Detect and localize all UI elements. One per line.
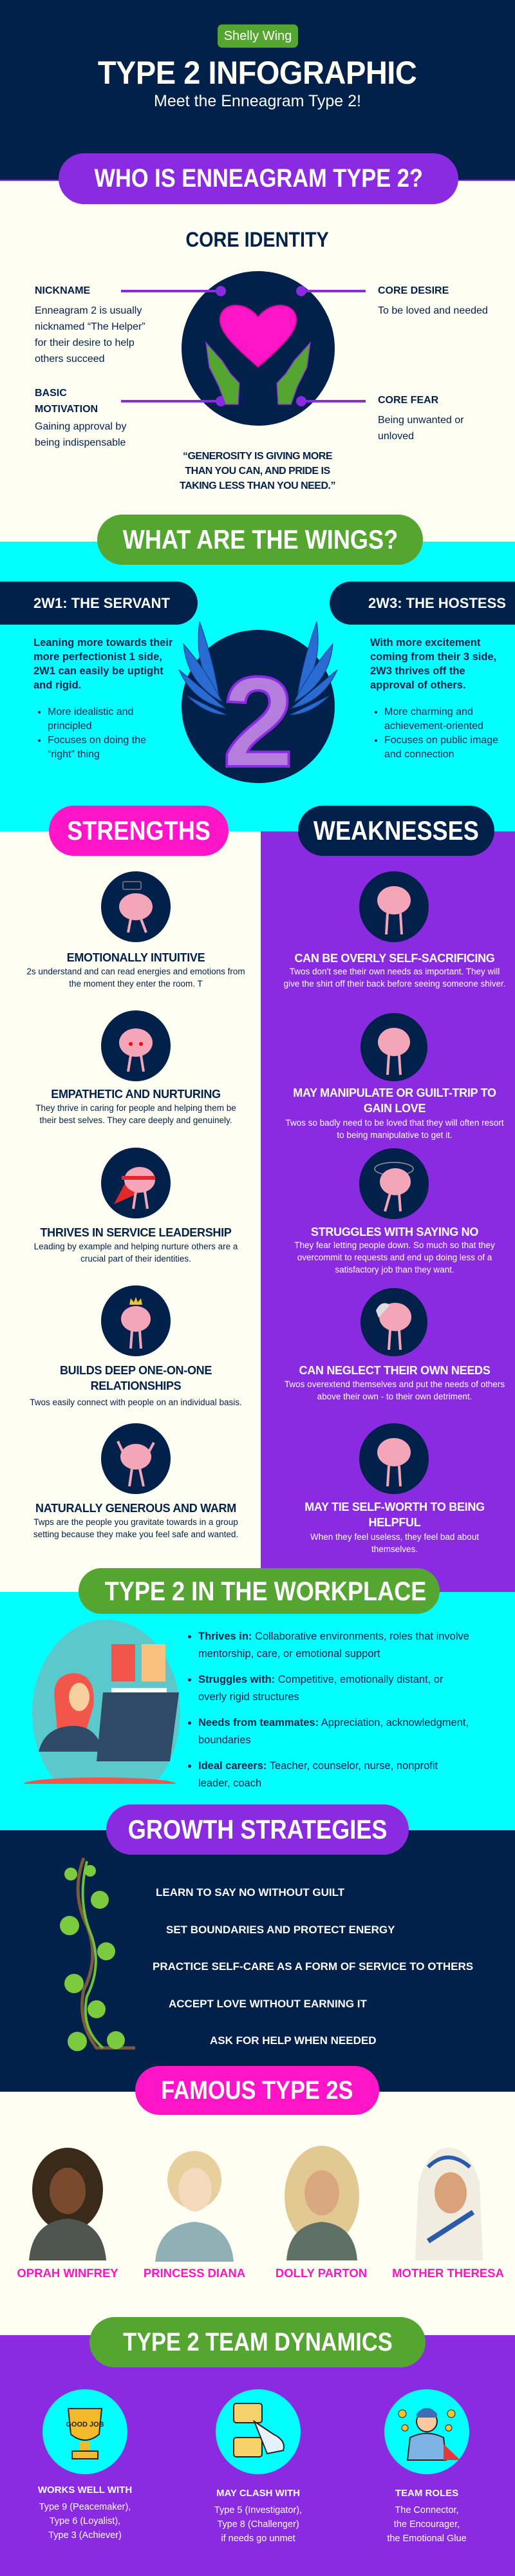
weakness 1: Twos don't see their own needs as important. They will give the shirt off their back before seeing someone shiver. [284, 967, 505, 989]
heading: who is type 2: WHO IS ENNEAGRAM TYPE 2? [94, 164, 423, 193]
portrait: oprah [29, 2148, 106, 2260]
icon: brain [359, 1423, 429, 1494]
text: basic motivation: BASIC [35, 388, 67, 399]
author badge: Shelly Wing [224, 29, 292, 43]
text: core fear [378, 395, 464, 442]
text: nickname: NICKNAME [35, 285, 90, 296]
portrait: dolly [285, 2146, 359, 2260]
text: workplace bullets: Ideal careers: Teacher, counselor, nurse, nonprofit leader, coach [198, 1760, 438, 1789]
strength 4: Twos easily connect with people on an individual basis. [30, 1397, 242, 1407]
heading: famous type 2s [135, 2066, 379, 2115]
heart [220, 305, 296, 367]
illustration: woman at desk [24, 1620, 180, 1784]
text: 2w1 description: More idealistic and principled [48, 706, 133, 732]
team: may clash with [197, 2389, 319, 2547]
text: PRINCESS DIANA [144, 2266, 245, 2280]
text: PRACTICE SELF-CARE AS A FORM OF SERVICE TO OTHERS [153, 1960, 473, 1973]
team: team roles: The Connector, [395, 2505, 459, 2515]
strength 1: 2s understand and can read energies and emotions from the moment they enter the room. T [26, 967, 245, 989]
strength 4 [30, 1285, 242, 1407]
icon: dizzy brain [359, 1148, 429, 1219]
strength 2 [35, 1010, 236, 1125]
heading: team dynamics [89, 2317, 426, 2367]
icon: trophy: GOOD JOB [66, 2421, 104, 2429]
team: team roles: the Encourager, [394, 2519, 460, 2530]
icon: brain [101, 1010, 171, 1081]
icon: brain [359, 871, 429, 942]
text: LEARN TO SAY NO WITHOUT GUILT [156, 1886, 344, 1899]
text: 2w3 description: With more excitement coming from their 3 side, 2W3 thrives off the approval of others. [370, 637, 496, 691]
text: workplace bullets: Struggles with: Competitive, emotionally distant, or overly rigid structures [198, 1674, 444, 1703]
team: works well with: WORKS WELL WITH [38, 2485, 132, 2496]
icon: winged 2 [179, 621, 337, 786]
portrait: mother theresa [415, 2148, 483, 2260]
background: growth navy [0, 1830, 515, 2092]
team: may clash with: if needs go unmet [221, 2533, 295, 2544]
core identity graphic [121, 271, 366, 426]
strength 3: Leading by example and helping nurture others are a crucial part of their identities. [34, 1242, 238, 1264]
weakness 2 [285, 1013, 504, 1140]
text: basic motivation [35, 388, 126, 448]
text: core fear: CORE FEAR [378, 395, 438, 406]
text: 2w3 description: More charming and achievement-oriented [384, 706, 483, 732]
weakness 4: CAN NEGLECT THEIR OWN NEEDS [299, 1364, 490, 1377]
heading: workplace [79, 1568, 440, 1614]
text: workplace bullets: Needs from teammates: Appreciation, acknowledgment, boundaries [198, 1717, 469, 1746]
team: team roles: TEAM ROLES [395, 2488, 458, 2499]
text: ACCEPT LOVE WITHOUT EARNING IT [169, 1998, 367, 2010]
heading: growth strategies: GROWTH STRATEGIES [128, 1814, 387, 1844]
text: 2w1 description: Leaning more towards their more perfectionist 1 side, 2W1 can easily be uptight and rigid. [33, 637, 173, 691]
subtitle: Meet the Enneagram Type 2! [154, 92, 361, 110]
background: team purple [0, 2335, 515, 2576]
weakness 2: MAY MANIPULATE OR GUILT-TRIP TO GAIN LOVE [293, 1086, 496, 1115]
hands [206, 343, 239, 404]
background: weaknesses purple [261, 831, 515, 1592]
strength 5: Twps are the people you gravitate towards in a group setting because they make you feel safe and wanted. [33, 1517, 238, 1539]
illustration: vine [60, 1857, 135, 2051]
text: workplace bullets: Thrives in: Collaborative environments, roles that involve mentorship, care, or emotional support [198, 1631, 469, 1660]
icon: sleepy brain [360, 1288, 427, 1356]
heading: strengths: STRENGTHS [67, 815, 211, 846]
portrait: diana [155, 2151, 234, 2262]
text: famous names [17, 2266, 504, 2280]
weakness 1: CAN BE OVERLY SELF-SACRIFICING [294, 952, 495, 965]
text: basic motivation: Gaining approval by being indispensable [35, 421, 126, 448]
text: 2w3 description [370, 637, 498, 760]
tab: 2w3: 2W3: THE HOSTESS [368, 595, 506, 611]
background: cream core [0, 180, 515, 542]
tab: 2w3 [330, 582, 515, 625]
strength 4: BUILDS DEEP ONE-ON-ONE RELATIONSHIPS [60, 1364, 212, 1392]
author badge [218, 24, 298, 48]
weakness 2: Twos so badly need to be loved that they will often resort to being manipulative to get it. [285, 1118, 504, 1140]
text: workplace bullets [188, 1631, 469, 1789]
team: works well with: Type 3 (Achiever) [48, 2530, 122, 2541]
strength 1 [26, 871, 245, 989]
weakness 5: When they feel useless, they feel bad about themselves. [310, 1532, 479, 1554]
heading: team dynamics: TYPE 2 TEAM DYNAMICS [123, 2328, 392, 2356]
text: core fear: Being unwanted or unloved [378, 415, 464, 442]
icon: brain [360, 1013, 427, 1081]
team: may clash with: MAY CLASH WITH [216, 2488, 300, 2499]
team: works well with: Type 6 (Loyalist), [50, 2516, 120, 2526]
heading: famous type 2s: FAMOUS TYPE 2S [161, 2076, 353, 2105]
text: 2w3 description: Focuses on public image and connection [384, 735, 498, 760]
team: works well with [24, 2389, 146, 2544]
text: 2w1 description [33, 637, 173, 760]
text: core desire: CORE DESIRE [378, 285, 449, 296]
icon: brain [101, 1423, 171, 1494]
strength 5 [33, 1423, 238, 1539]
heading: growth strategies [106, 1804, 409, 1855]
weakness 3: They fear letting people down. So much so that they overcommit to requests and end up doing less of a satisfactory job than they want. [294, 1240, 495, 1274]
heading: workplace: TYPE 2 IN THE WORKPLACE [105, 1576, 426, 1606]
icon: crowned brain [101, 1285, 171, 1356]
quote: “GENEROSITY IS GIVING MORE THAN YOU CAN, AND PRIDE IS TAKING LESS THAN YOU NEED.” [180, 451, 335, 491]
text: MOTHER THERESA [392, 2266, 504, 2280]
background: workplace cyan [0, 1592, 515, 1830]
heading: core identity: CORE IDENTITY [186, 228, 329, 251]
text: SET BOUNDARIES AND PROTECT ENERGY [166, 1924, 395, 1936]
text: OPRAH WINFREY [17, 2266, 118, 2280]
text: 2w1 description: Focuses on doing the “right” thing [48, 735, 146, 760]
weakness 3: STRUGGLES WITH SAYING NO [311, 1226, 478, 1238]
background: cyan wings [0, 542, 515, 831]
weakness 3 [294, 1148, 495, 1274]
strength 2: EMPATHETIC AND NURTURING [51, 1088, 221, 1101]
heading: who is type 2 [59, 153, 458, 204]
title: TYPE 2 INFOGRAPHIC [98, 55, 417, 91]
weakness 1 [284, 871, 505, 989]
tab: 2w1 [0, 582, 198, 625]
text: nickname: Enneagram 2 is usually nicknamed “The Helper” for their desire to help others succeed [35, 305, 145, 365]
strength 1: EMOTIONALLY INTUITIVE [67, 951, 205, 964]
text: DOLLY PARTON [276, 2266, 367, 2280]
text: core desire [378, 285, 488, 316]
portraits [29, 2146, 483, 2262]
heading: wings [97, 515, 423, 565]
strength 5: NATURALLY GENEROUS AND WARM [35, 1502, 236, 1515]
heading: wings: WHAT ARE THE WINGS? [122, 524, 398, 554]
strength 3 [34, 1148, 238, 1264]
text: basic motivation: MOTIVATION [35, 404, 98, 415]
text: core desire: To be loved and needed [378, 305, 488, 316]
strength 2: They thrive in caring for people and helping them be their best selves. They care deeply and genuinely. [35, 1103, 236, 1125]
icon: hero person [384, 2389, 469, 2474]
icon: choice hand [216, 2389, 301, 2474]
team: team roles: the Emotional Glue [387, 2533, 467, 2544]
weakness 5 [304, 1423, 485, 1554]
team: works well with: Type 9 (Peacemaker), [39, 2502, 131, 2512]
team: may clash with: Type 8 (Challenger) [217, 2519, 299, 2530]
weakness 4 [285, 1288, 505, 1401]
heading: weaknesses: WEAKNESSES [314, 815, 479, 846]
heading: strengths [49, 806, 229, 856]
team: may clash with: Type 5 (Investigator), [214, 2505, 302, 2515]
tab: 2w1: 2W1: THE SERVANT [33, 595, 170, 611]
weakness 5: MAY TIE SELF-WORTH TO BEING HELPFUL [304, 1501, 485, 1529]
weakness 4: Twos overextend themselves and put the needs of others above their own - to their own detriment. [285, 1379, 505, 1401]
icon: trophy [42, 2389, 127, 2474]
background: famous cream [0, 2092, 515, 2335]
strength 3: THRIVES IN SERVICE LEADERSHIP [40, 1226, 232, 1239]
icon: superhero brain [101, 1148, 171, 1218]
text: growth strategies list [153, 1886, 473, 2047]
icon: brain [101, 871, 171, 942]
team: team roles [366, 2389, 488, 2547]
heading: weaknesses [298, 806, 494, 856]
background: header navy [0, 0, 515, 180]
text: ASK FOR HELP WHEN NEEDED [210, 2034, 376, 2047]
background: strengths cream [0, 831, 261, 1592]
